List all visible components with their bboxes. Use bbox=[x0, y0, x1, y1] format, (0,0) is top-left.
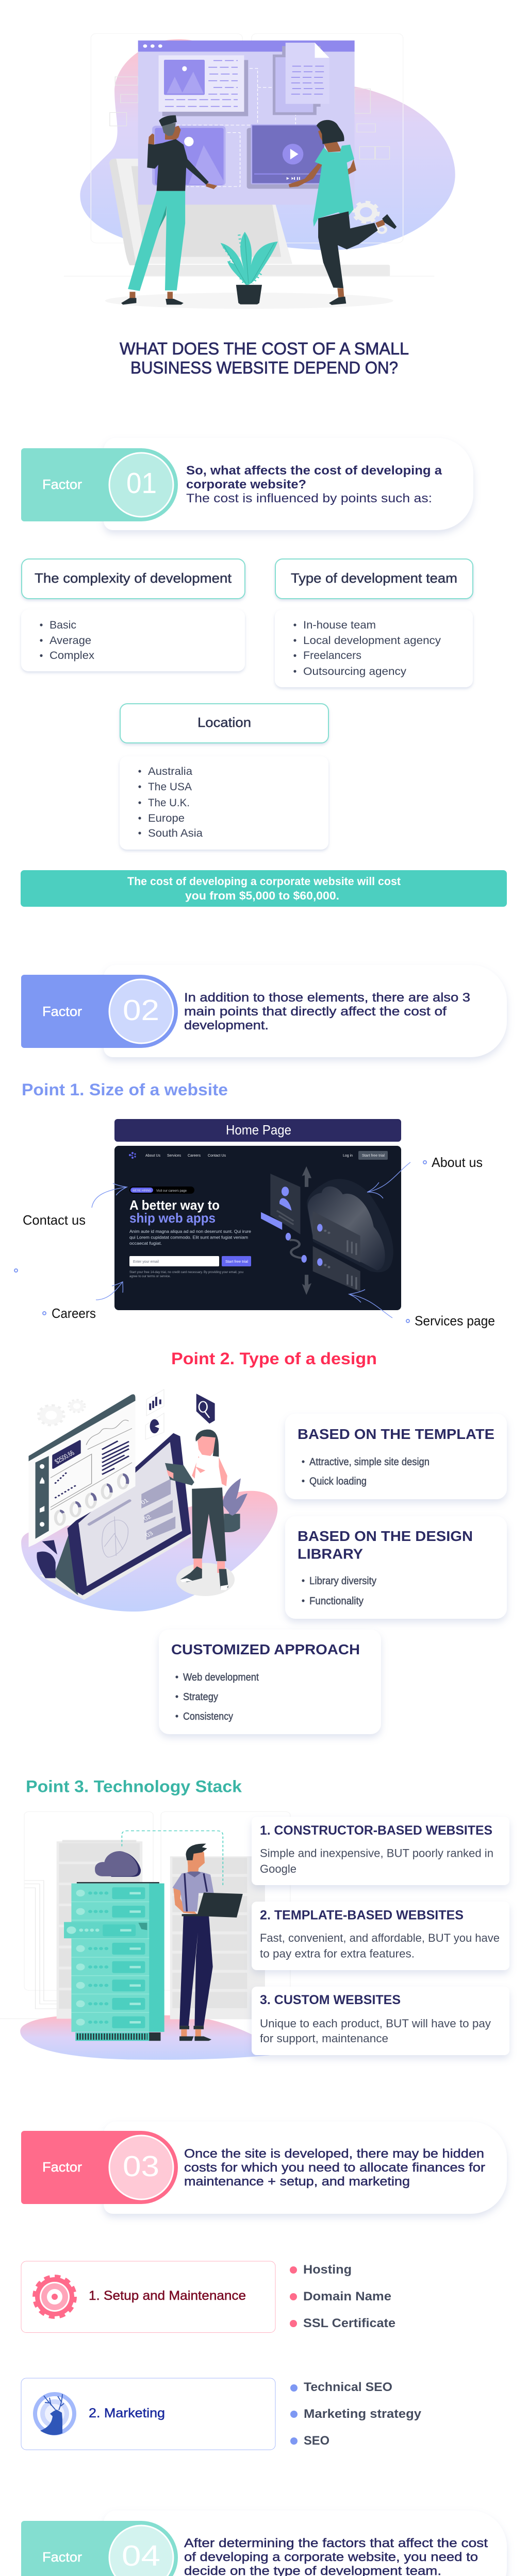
factor 04 text: After determining the factors that affect the cost bbox=[184, 2536, 488, 2550]
picture card bbox=[152, 126, 226, 185]
hero copy: Start free trial bbox=[225, 1260, 248, 1264]
list: marketing items: Marketing strategy bbox=[304, 2407, 422, 2421]
home page bar bbox=[114, 1119, 401, 1142]
factor 02 card bbox=[104, 965, 507, 1057]
heading: point 2: Point 2. Type of a design bbox=[171, 1349, 377, 1368]
background racks bbox=[57, 1840, 265, 2019]
card: constructor-based websites: Google bbox=[260, 1862, 296, 1875]
factor 02 badge: 02 bbox=[123, 994, 159, 1027]
factor 03 text: Once the site is developed, there may be hidden bbox=[184, 2147, 484, 2161]
gradient blob bbox=[80, 39, 455, 250]
panel: type of development team bbox=[275, 559, 473, 687]
decorative ring bbox=[14, 1269, 18, 1272]
hero copy: Enter your email bbox=[133, 1260, 159, 1264]
factor 04 badge: 04 bbox=[122, 2539, 160, 2572]
label: careers: Careers bbox=[52, 1306, 96, 1321]
factor 04 badge: Factor bbox=[42, 2549, 82, 2565]
heading box: Type of development team bbox=[291, 570, 457, 586]
hero illustration bbox=[64, 33, 455, 309]
factor 02 text bbox=[184, 991, 470, 1032]
navigation: Start free trial bbox=[362, 1154, 385, 1158]
factor 01 text: So, what affects the cost of developing a bbox=[186, 464, 442, 478]
hero copy: Start your free 14-day trial, no credit card necessary. By providing your email, you bbox=[129, 1271, 243, 1274]
box: setup and maintenance bbox=[21, 2261, 275, 2333]
list: Average bbox=[50, 635, 91, 647]
card: template-based websites bbox=[252, 1902, 509, 1970]
card: template-based websites: 2. TEMPLATE-BASED WEBSITES bbox=[260, 1908, 464, 1923]
factor 03 badge: 03 bbox=[123, 2150, 159, 2183]
article card bbox=[159, 55, 248, 116]
server rack bbox=[64, 1882, 164, 2041]
factor 01 text: The cost is influenced by points such as: bbox=[186, 492, 432, 505]
list: Europe bbox=[148, 812, 185, 824]
card: based on the design library: Library diversity bbox=[309, 1575, 376, 1587]
card: customized approach bbox=[159, 1630, 381, 1734]
man bbox=[121, 115, 217, 304]
callout: cost range: you from $5,000 to $60,000. bbox=[185, 889, 339, 902]
arrow: about us bbox=[367, 1162, 410, 1198]
title: BUSINESS WEBSITE DEPEND ON? bbox=[130, 358, 398, 377]
navigation: Careers bbox=[188, 1154, 201, 1158]
card: based on the design library: LIBRARY bbox=[298, 1546, 363, 1562]
card: custom websites: 3. CUSTOM WEBSITES bbox=[260, 1993, 401, 2007]
list: The USA bbox=[148, 781, 192, 793]
card: customized approach: Consistency bbox=[183, 1711, 233, 1722]
callout: cost range bbox=[21, 870, 507, 907]
list: marketing items bbox=[290, 2380, 422, 2448]
panel: factor 01 bbox=[21, 438, 473, 530]
label: about us: About us bbox=[432, 1155, 483, 1170]
faint panels bbox=[24, 1811, 290, 2009]
factor 03 card bbox=[104, 2122, 507, 2214]
title: WHAT DOES THE COST OF A SMALL bbox=[120, 339, 409, 358]
card: custom websites: for support, maintenance bbox=[260, 2032, 388, 2045]
factor 01 text: corporate website? bbox=[186, 478, 306, 492]
blob bbox=[21, 1491, 277, 1612]
heading box bbox=[120, 704, 328, 743]
hero copy: Visit our careers page bbox=[156, 1189, 187, 1193]
cloud server artwork bbox=[261, 1166, 393, 1295]
tablet: 01 bbox=[139, 1498, 150, 1506]
factor 04 text: of developing a corporate website, you need to bbox=[184, 2550, 478, 2564]
arrow: services page bbox=[349, 1290, 392, 1318]
panel: factor 04 bbox=[21, 2511, 507, 2576]
factor 04 card bbox=[104, 2511, 507, 2576]
list bbox=[275, 609, 473, 687]
factor 02 text: main points that directly affect the cost of bbox=[184, 1005, 447, 1019]
label: contact us: Contact us bbox=[23, 1212, 86, 1228]
card: based on the template bbox=[285, 1414, 507, 1499]
video card bbox=[247, 124, 324, 189]
factor 01 card bbox=[104, 438, 473, 530]
navigation: Services bbox=[167, 1154, 182, 1158]
icon: deer bbox=[33, 2392, 76, 2435]
factor 03 text: maintenance + setup, and marketing bbox=[184, 2175, 410, 2189]
ground line and shadow bbox=[64, 276, 434, 309]
list: setup items: Domain Name bbox=[303, 2290, 391, 2303]
hero copy: qui Lorem cupidatat commodo. Elit sunt amet fugiat veniam bbox=[129, 1234, 248, 1240]
list bbox=[120, 756, 328, 850]
navigation bbox=[129, 1151, 388, 1160]
design illustration bbox=[21, 1389, 277, 1612]
factor 03 text: costs for which you need to allocate finances for bbox=[184, 2161, 485, 2175]
list: setup items: SSL Certificate bbox=[303, 2316, 395, 2330]
heading box bbox=[22, 559, 245, 599]
woman bbox=[289, 120, 397, 305]
card: constructor-based websites: Simple and inexpensive, BUT poorly ranked in bbox=[260, 1846, 493, 1860]
hero copy bbox=[129, 1187, 251, 1278]
card: template-based websites: Fast, convenient, and affordable, BUT you have bbox=[260, 1931, 500, 1944]
callout: cost range: The cost of developing a corporate website will cost bbox=[127, 875, 401, 888]
card: customized approach: Strategy bbox=[183, 1691, 218, 1703]
dashed route bbox=[122, 1831, 223, 1885]
card: based on the template: Attractive, simple site design bbox=[309, 1456, 430, 1468]
card: customized approach: CUSTOMIZED APPROACH bbox=[171, 1641, 360, 1657]
list: Basic bbox=[50, 619, 76, 631]
list: marketing items: Technical SEO bbox=[304, 2380, 392, 2394]
card: based on the template: BASED ON THE TEMPLATE bbox=[298, 1426, 494, 1442]
card: constructor-based websites: 1. CONSTRUCTOR-BASED WEBSITES bbox=[260, 1823, 492, 1838]
website screenshot bbox=[114, 1146, 401, 1310]
label: services page: Services page bbox=[415, 1313, 495, 1328]
list: Complex bbox=[50, 650, 95, 662]
panel: complexity of development bbox=[21, 559, 245, 671]
home page bar: Home Page bbox=[226, 1122, 291, 1138]
factor 01 text bbox=[186, 464, 442, 505]
card: constructor-based websites bbox=[252, 1817, 509, 1885]
factor 03 badge: Factor bbox=[42, 2159, 82, 2175]
list bbox=[21, 609, 245, 671]
plant bbox=[221, 232, 278, 304]
hero copy: occaecat fugiat. bbox=[129, 1241, 162, 1246]
panel: location bbox=[120, 704, 328, 850]
laptop bbox=[109, 159, 390, 277]
box: marketing: 2. Marketing bbox=[89, 2406, 165, 2420]
tablet bbox=[40, 1433, 192, 1600]
panel: factor 03 bbox=[21, 2122, 507, 2214]
list: setup items: Hosting bbox=[303, 2263, 352, 2277]
list: Outsourcing agency bbox=[303, 666, 407, 677]
icon: gear bbox=[35, 2277, 75, 2317]
mini charts bbox=[145, 1389, 164, 1439]
factor 02 badge bbox=[21, 975, 178, 1048]
server illustration bbox=[0, 1811, 290, 2060]
hero copy: Anim aute id magna aliqua ad ad non deserunt sunt. Qui irure bbox=[129, 1229, 251, 1234]
dashboard panel: $2500.66 bbox=[53, 1449, 76, 1465]
card: based on the design library: Functionality bbox=[309, 1596, 364, 1607]
hero copy: ship web apps bbox=[129, 1210, 216, 1226]
box: setup and maintenance: 1. Setup and Maintenance bbox=[89, 2289, 246, 2303]
card: based on the design library: BASED ON THE DESIGN bbox=[298, 1528, 473, 1544]
hero copy: agree to our terms or service. bbox=[129, 1275, 171, 1278]
card: customized approach: Web development bbox=[183, 1672, 259, 1683]
hero copy: A better way to bbox=[129, 1197, 220, 1213]
list: Local development agency bbox=[303, 635, 441, 647]
tablet: 02 bbox=[142, 1514, 153, 1522]
factor 02 text: In addition to those elements, there are also 3 bbox=[184, 991, 470, 1005]
list: setup items bbox=[290, 2263, 395, 2330]
list: South Asia bbox=[148, 827, 203, 839]
heading: point 1: Point 1. Size of a website bbox=[22, 1080, 228, 1099]
cloud bbox=[95, 1851, 141, 1877]
factor 01 badge: 01 bbox=[126, 467, 157, 500]
navigation: Log in bbox=[343, 1154, 353, 1158]
factor 03 badge bbox=[21, 2131, 178, 2204]
factor 03 text bbox=[184, 2147, 485, 2189]
document bbox=[273, 43, 329, 115]
navigation: Contact Us bbox=[208, 1154, 226, 1158]
hero copy: WE'RE HIRING bbox=[133, 1189, 151, 1192]
dashboard panel bbox=[29, 1394, 136, 1547]
list: Australia bbox=[148, 766, 192, 777]
factor 01 badge: Factor bbox=[42, 477, 82, 492]
gear bbox=[354, 202, 386, 233]
card: template-based websites: to pay extra for extra features. bbox=[260, 1947, 415, 1960]
heading box: Location bbox=[197, 715, 251, 730]
list: Freelancers bbox=[303, 650, 361, 662]
card: custom websites bbox=[252, 1987, 509, 2055]
card: based on the template: Quick loading bbox=[309, 1476, 367, 1487]
factor 02 badge: Factor bbox=[42, 1004, 82, 1019]
list: marketing items: SEO bbox=[304, 2434, 329, 2448]
factor 04 text bbox=[184, 2536, 488, 2576]
factor 04 badge bbox=[21, 2521, 178, 2576]
heading box bbox=[275, 559, 473, 599]
title bbox=[120, 339, 409, 377]
browser window bbox=[138, 41, 355, 205]
factor 01 badge bbox=[21, 448, 178, 521]
arrow: contact us bbox=[92, 1183, 127, 1208]
tablet: 03 bbox=[144, 1531, 155, 1538]
card: custom websites: Unique to each product, BUT will have to pay bbox=[260, 2017, 491, 2030]
faint background panels bbox=[91, 33, 403, 243]
list: In-house team bbox=[303, 619, 376, 631]
dashed connectors bbox=[177, 69, 318, 187]
ground blob bbox=[20, 2015, 274, 2060]
plant left bbox=[37, 1540, 57, 1578]
navigation: About Us bbox=[145, 1154, 160, 1158]
heading: point 3: Point 3. Technology Stack bbox=[26, 1777, 242, 1796]
faint gears bbox=[38, 1400, 85, 1425]
arrow: careers bbox=[96, 1282, 123, 1300]
card: based on the design library bbox=[285, 1516, 507, 1619]
list: The U.K. bbox=[148, 797, 190, 809]
technician bbox=[172, 1843, 243, 2041]
box: marketing bbox=[21, 2378, 275, 2450]
woman with tablet bbox=[165, 1430, 248, 1596]
search bubble bbox=[196, 1394, 215, 1423]
panel: factor 02 bbox=[21, 965, 507, 1057]
heading box: The complexity of development bbox=[35, 570, 232, 586]
factor 02 text: development. bbox=[184, 1019, 269, 1032]
